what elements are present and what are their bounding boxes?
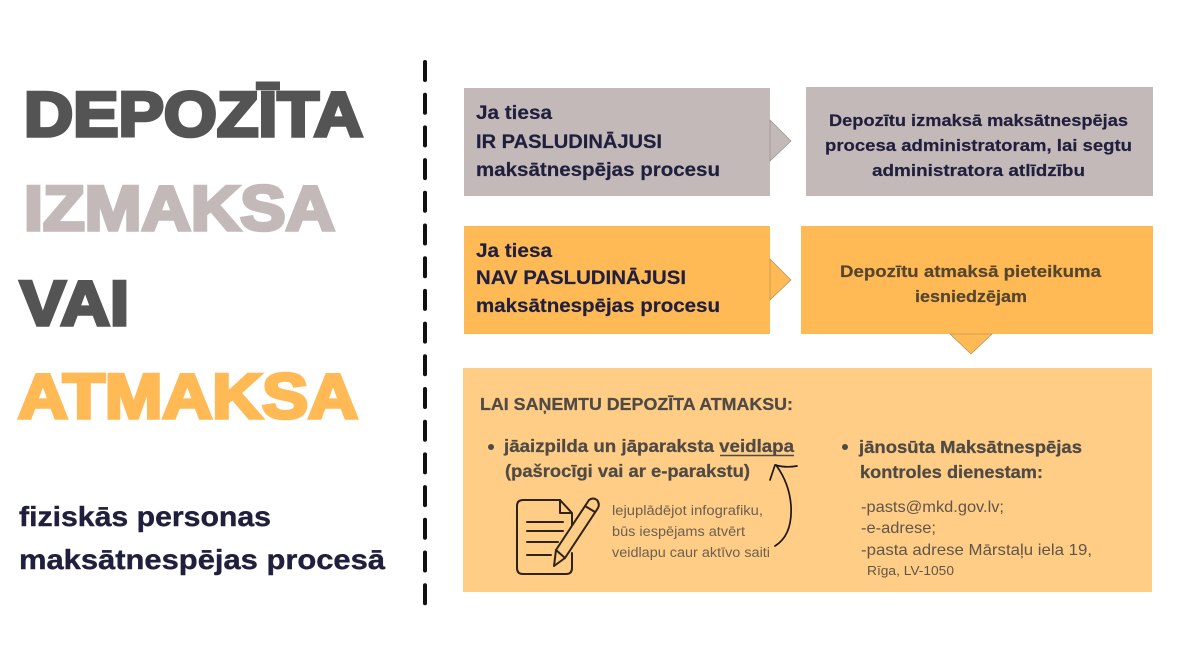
subtitle: maksātnespējas procesā <box>19 544 385 575</box>
text: condition IR PASLUDINĀJUSI <box>476 103 720 181</box>
arrow: orange down <box>950 334 992 354</box>
title word: ATMAKSA: ATMAKSA <box>18 362 358 432</box>
text: contact list: -pasta adrese Mārstaļu iela 19, <box>861 542 1092 559</box>
bullet: send to insolvency service <box>842 437 1082 482</box>
panel: court declared insolvency <box>464 88 770 196</box>
text: contact list: -e-adrese; <box>861 520 936 537</box>
bullet: fill in form: (pašrocīgi vai ar e-parakstu) <box>505 461 750 481</box>
text: paid to administrator <box>825 111 1132 180</box>
icon: document and pencil <box>517 498 599 574</box>
subtitle <box>19 501 385 575</box>
text: download note: būs iespējams atvērt <box>612 524 745 539</box>
text: download note: lejuplādējot infografiku, <box>612 503 763 518</box>
text: condition NAV PASLUDINĀJUSI: maksātnespējas procesu <box>476 296 720 317</box>
arrow: curved to form link <box>770 465 797 546</box>
panel: grey outcome <box>806 87 1153 196</box>
text: condition NAV PASLUDINĀJUSI: Ja tiesa <box>476 241 552 262</box>
arrow: grey right <box>770 120 791 161</box>
bullet: fill in form <box>488 436 794 481</box>
panel: orange outcome <box>801 226 1153 334</box>
text: condition IR PASLUDINĀJUSI: maksātnespējas procesu <box>476 160 720 181</box>
title word: DEPOZĪTA: DEPOZĪTA <box>24 80 363 150</box>
text: paid to administrator: Depozītu izmaksā maksātnespējas <box>829 111 1128 130</box>
text: returned to applicant: Depozītu atmaksā pieteikuma <box>840 262 1102 281</box>
text: contact list: Rīga, LV-1050 <box>867 563 954 578</box>
bullet: fill in form: jāaizpilda un jāparaksta veidlapa <box>503 436 794 456</box>
text: contact list <box>861 499 1092 578</box>
title: depozīta izmaksa vai atmaksa <box>18 80 363 432</box>
panel: court not declared insolvency <box>464 226 770 334</box>
text: condition IR PASLUDINĀJUSI: Ja tiesa <box>476 103 552 124</box>
bullet: send to insolvency service: kontroles dienestam: <box>860 462 1043 482</box>
title word: VAI: VAI <box>20 269 129 339</box>
text: returned to applicant: iesniedzējam <box>915 287 1027 306</box>
text: condition NAV PASLUDINĀJUSI <box>476 241 720 317</box>
text: contact list: -pasts@mkd.gov.lv; <box>861 499 1004 516</box>
text: condition IR PASLUDINĀJUSI: IR PASLUDINĀJUSI <box>476 132 662 153</box>
text: paid to administrator: administratora atlīdzību <box>872 161 1085 180</box>
text: download note <box>612 503 770 560</box>
title word: IZMAKSA: IZMAKSA <box>24 174 335 244</box>
heading: refund: LAI SAŅEMTU DEPOZĪTA ATMAKSU: <box>480 394 793 414</box>
bullet: send to insolvency service: jānosūta Maksātnespējas <box>858 437 1082 457</box>
panel: how to receive refund <box>463 368 1152 592</box>
text: returned to applicant <box>840 262 1102 306</box>
text: paid to administrator: procesa administratoram, lai segtu <box>825 136 1132 155</box>
arrow: orange right <box>770 259 791 300</box>
text: download note: veidlapu caur aktīvo saiti <box>612 545 770 560</box>
subtitle: fiziskās personas <box>19 501 271 532</box>
text: condition NAV PASLUDINĀJUSI: NAV PASLUDINĀJUSI <box>476 268 686 289</box>
